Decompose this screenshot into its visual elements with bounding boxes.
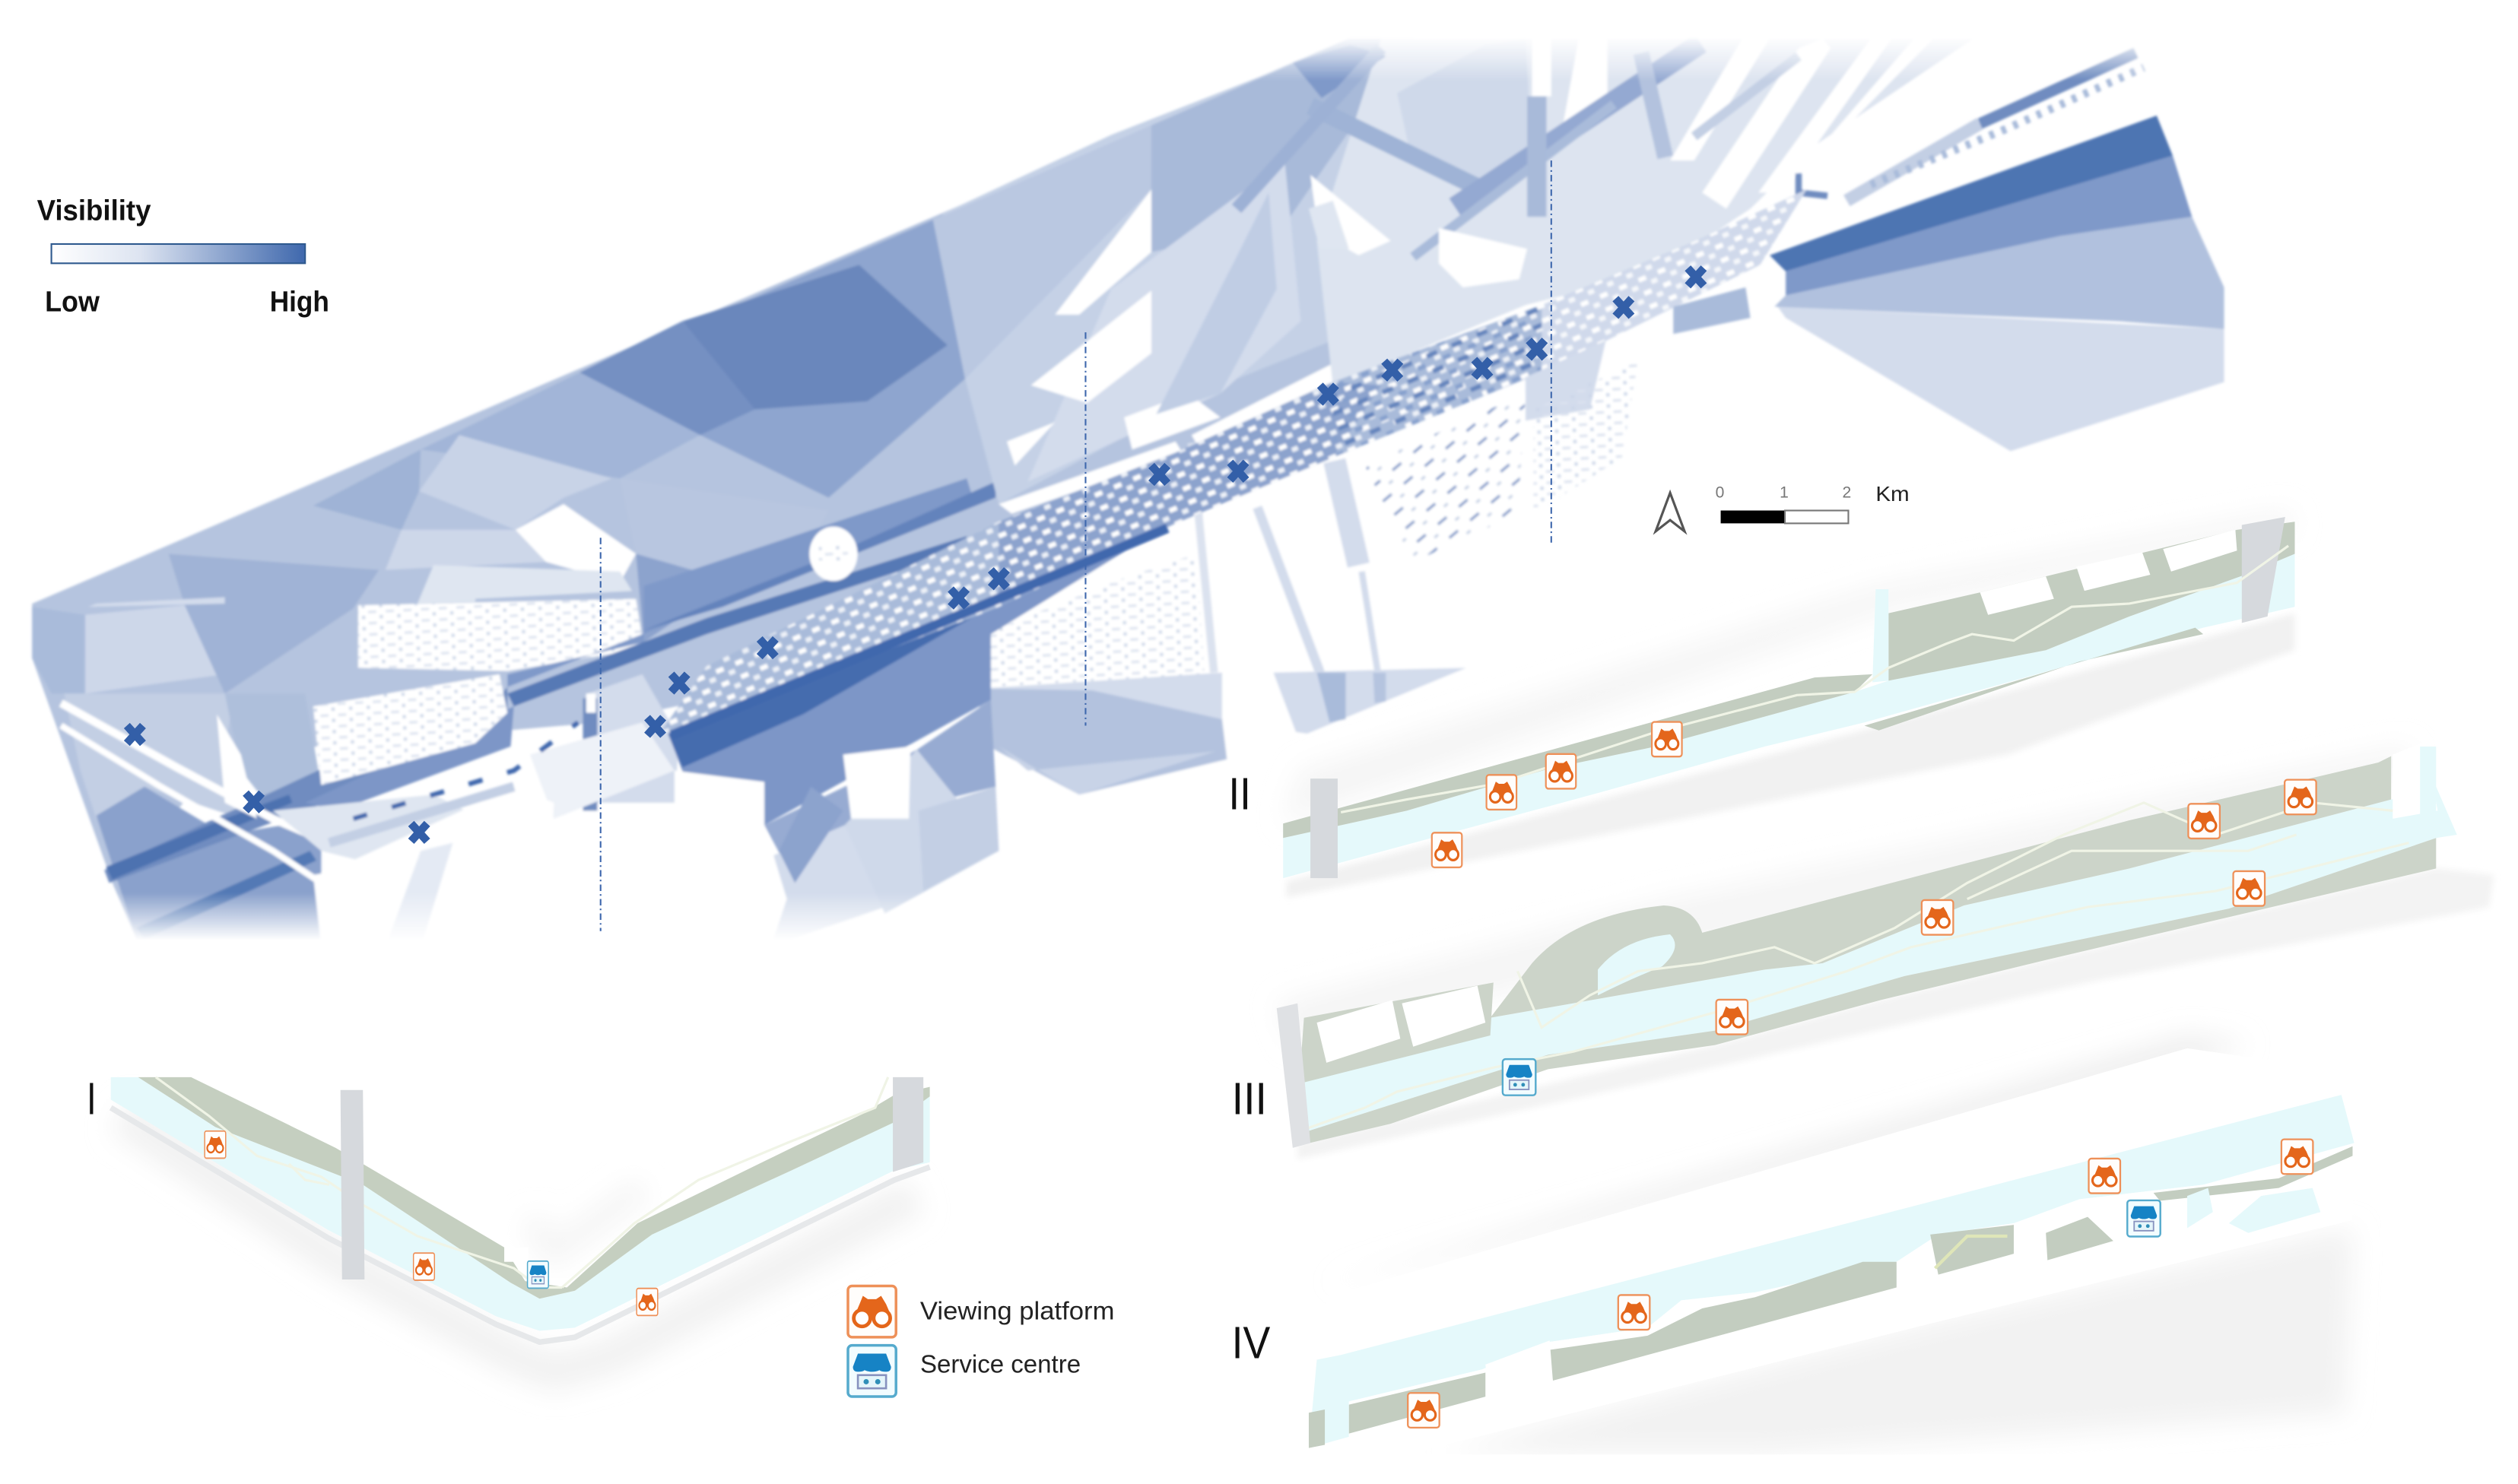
gray bridges bbox=[341, 1090, 364, 1279]
north bank with bay bbox=[1491, 756, 2391, 1018]
service centre label: Service centre bbox=[920, 1349, 1081, 1378]
green patches bbox=[1548, 1262, 1897, 1381]
north west bank bbox=[1299, 982, 1494, 1083]
panel: section IV bbox=[1309, 1035, 2354, 1453]
river speckle band bbox=[659, 189, 1807, 735]
section label IV: IV bbox=[1232, 1317, 1271, 1368]
river water bbox=[1309, 1095, 2354, 1448]
white land bbox=[1349, 1143, 2354, 1453]
river water bbox=[1283, 554, 2294, 878]
observation point crosses bbox=[127, 268, 1704, 841]
viewing platform icons bbox=[1432, 722, 1682, 867]
wedge north of river bbox=[507, 478, 975, 687]
river water bbox=[111, 1077, 930, 1331]
south centre white field with rays bbox=[978, 449, 1485, 803]
icon: viewing platform bbox=[848, 1286, 896, 1337]
north arrow bbox=[1656, 493, 1684, 531]
left section bbox=[85, 605, 225, 693]
scale bar: 0 bbox=[1716, 484, 1724, 502]
white circle landmark bbox=[809, 527, 858, 581]
white road bands left bbox=[61, 703, 386, 867]
legend: visibility bbox=[37, 195, 329, 319]
top and bottom fade bbox=[1237, 0, 2200, 39]
panel: section I bbox=[111, 1077, 930, 1372]
footpaths bbox=[156, 1077, 888, 1288]
canal bbox=[1872, 589, 1888, 682]
icon: service centre bbox=[848, 1346, 896, 1397]
south bank bbox=[1865, 628, 2203, 731]
white built blocks bbox=[358, 599, 644, 671]
outer bank bbox=[111, 1108, 930, 1342]
panel: section II bbox=[1283, 511, 2294, 897]
green bank bbox=[138, 1077, 930, 1298]
south bank bbox=[1296, 838, 2436, 1146]
service centre icon bbox=[528, 1261, 548, 1288]
viewing platform icons bbox=[205, 1131, 658, 1315]
scale bar: Km bbox=[1875, 482, 1910, 506]
vertical section dividers bbox=[601, 160, 1551, 931]
white upper strip bbox=[1325, 1048, 2342, 1356]
south left speckle bbox=[321, 787, 554, 939]
river water bbox=[1296, 787, 2457, 1135]
upper mid light area bbox=[943, 39, 1413, 504]
white building blocks north bbox=[1310, 175, 1391, 255]
north east streak field bbox=[1317, 39, 1973, 385]
service centre icon bbox=[1503, 1059, 1535, 1096]
footpath bbox=[1341, 546, 2288, 812]
parking blocks bbox=[1980, 576, 2054, 615]
water ponds bbox=[2187, 1188, 2213, 1228]
gradient bar bbox=[52, 244, 305, 263]
parking blocks bbox=[1317, 1000, 1400, 1063]
viewing platform icons bbox=[1716, 780, 2316, 1035]
panel: section III bbox=[1277, 742, 2494, 1159]
north bank bbox=[1283, 674, 1872, 838]
legend title: Visibility bbox=[37, 195, 151, 227]
upper dark diamond bbox=[579, 220, 965, 498]
section label III: III bbox=[1232, 1073, 1267, 1124]
east wedge bbox=[1778, 306, 2224, 451]
scale bar: 1 bbox=[1780, 484, 1789, 502]
scale bar: 2 bbox=[1842, 484, 1851, 502]
viewing platform label: Viewing platform bbox=[920, 1297, 1114, 1326]
visibility heat map bbox=[32, 0, 2224, 988]
main centre block bbox=[588, 674, 679, 803]
footpaths bbox=[1297, 803, 2408, 1132]
high label: High bbox=[270, 287, 329, 319]
viewing platform icons bbox=[1408, 1140, 2313, 1428]
north east dark streak bbox=[1846, 124, 1980, 201]
legend: facilities bbox=[848, 1286, 1114, 1397]
scale bar bbox=[1716, 482, 1910, 523]
main river wedge bbox=[668, 520, 1176, 825]
bridges bbox=[1310, 778, 1338, 878]
south river speckles bbox=[1365, 393, 1526, 562]
low label: Low bbox=[45, 287, 100, 319]
service centre icon bbox=[2127, 1200, 2161, 1237]
section label II: II bbox=[1228, 768, 1251, 819]
bridges bbox=[1277, 1004, 1310, 1148]
section label I: I bbox=[87, 1073, 97, 1124]
